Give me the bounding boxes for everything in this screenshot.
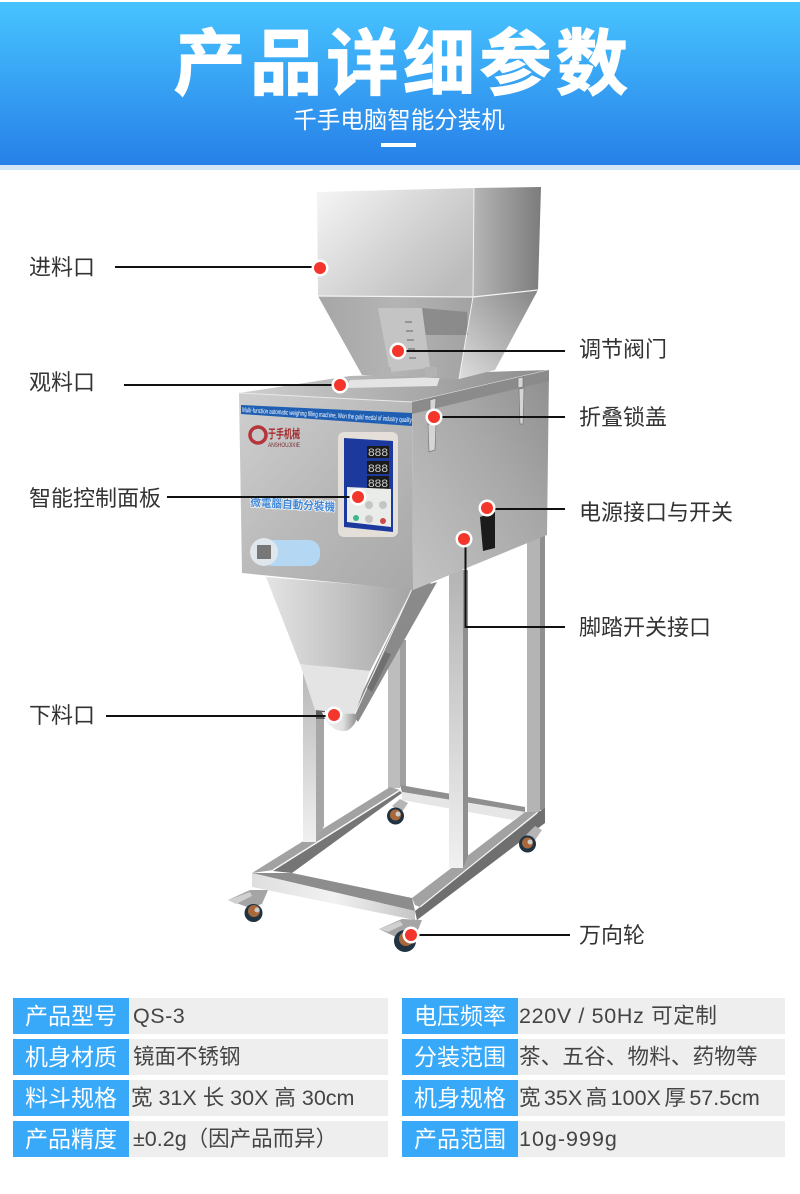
funnel front [266,577,412,671]
spec: 机身规格 [402,1080,785,1116]
hopper [317,187,541,379]
spec: 机身材质 [13,1039,388,1075]
spec: 料斗规格: 料斗规格 [25,1085,117,1111]
funnel lower plate [300,664,370,714]
title: 产品详细参数 [173,25,632,105]
body top [239,370,549,402]
callouts [29,255,733,948]
upper hopper right [473,187,541,297]
digital displays [367,446,389,489]
subtitle: 千手电脑智能分装机 [293,107,505,133]
upper hopper front [317,188,474,297]
front beam [252,873,415,920]
callout: 调节阀门: 调节阀门 [579,337,667,362]
hopper corner edges [459,188,474,379]
specification table [13,998,785,1157]
spec: 产品范围: 产品范围 [414,1126,506,1152]
callout: 万向轮: 万向轮 [579,923,645,948]
inspection window [345,377,440,388]
spec: 分装范围: 分装范围 [414,1044,506,1070]
callout: 折叠锁盖: 折叠锁盖 [579,405,667,430]
panel blue face [344,438,393,532]
sight window [378,308,437,377]
brand logo: ANSHOUJIXIE [268,443,300,449]
spec: 产品范围 [402,1121,785,1157]
display digits: 888 [368,447,388,459]
spec: 料斗规格: 宽 31X 长 30X 高 30cm [131,1086,354,1110]
callout: 智能控制面板 [29,486,366,511]
callout: 脚踏开关接口 [456,530,711,640]
callout: 观料口: 观料口 [29,370,95,395]
spec: 产品精度 [13,1121,388,1157]
callout: 折叠锁盖 [426,405,667,430]
lid band [412,370,549,414]
side clamp lower [367,652,391,692]
spout [322,712,357,731]
left beam [252,787,402,873]
lower hopper right [459,290,538,379]
caster: back left [387,799,408,824]
brand logo: 于手机械 [268,426,300,441]
callout: 电源接口与开关 [478,500,733,525]
spec: 产品型号: 产品型号 [25,1003,117,1029]
spec: 产品型号 [13,998,388,1034]
spec: 产品精度: ±0.2g（因产品而异） [133,1127,337,1151]
right beam [412,808,545,920]
callout: 调节阀门 [390,337,667,362]
caster: front right [379,919,422,952]
spec: 电压频率: 电压频率 [414,1003,506,1029]
stand frame [252,530,545,920]
spec: 产品型号: QS-3 [133,1004,185,1028]
display digits [368,447,388,490]
display digits: 888 [368,478,388,490]
funnel side [352,582,437,722]
brand logo [250,426,300,449]
callout: 进料口: 进料口 [29,255,95,280]
callout: 脚踏开关接口: 脚踏开关接口 [579,615,711,640]
spec: 产品精度: 产品精度 [25,1126,117,1152]
spec: 机身材质: 镜面不锈钢 [133,1045,241,1069]
callout: 下料口 [29,703,342,728]
callout: 下料口: 下料口 [29,703,95,728]
hopper edges [318,290,538,297]
spec: 机身规格: 机身规格 [414,1085,506,1111]
side clamp upper [409,566,431,617]
back right leg [527,530,545,812]
control panel [338,432,398,537]
body right face [412,371,549,590]
discharge funnel [266,566,437,731]
title dash [381,143,416,147]
front right leg [449,570,468,868]
main body [239,370,549,590]
callout: 观料口 [29,370,348,395]
funnel lit edge [355,589,412,714]
top edge highlight [239,370,549,402]
header banner [0,2,800,170]
latch: left [428,398,436,452]
front left leg [303,660,325,842]
display digits: 888 [368,463,388,475]
callout: 进料口 [29,255,328,280]
spec: 机身材质: 机身材质 [25,1044,117,1070]
callout: 电源接口与开关: 电源接口与开关 [579,500,733,525]
power socket [480,512,495,551]
spec: 电压频率 [402,998,785,1034]
spec: 产品范围: 10g-999g [519,1127,618,1151]
latch: right [518,377,524,424]
inner shadow [393,308,468,335]
blue strip [241,405,412,426]
back left leg [388,640,406,788]
caster: front left [228,890,268,922]
casters [228,799,542,952]
callout: 万向轮 [402,923,645,948]
back beam [400,785,525,820]
spec: 电压频率: 220V / 50Hz 可定制 [519,1004,718,1028]
QR sticker [250,538,320,566]
caster: back right [519,826,542,852]
spec: 料斗规格 [13,1080,388,1116]
callout: 智能控制面板: 智能控制面板 [29,486,161,511]
blue strip: Multi-function automatic weighing filling machine, Won the gold medal of industry quality [242,407,412,424]
lower hopper front [318,296,473,379]
spec: 机身规格: 宽 35X 高 100X 厚 57.5cm [519,1086,760,1110]
slogan: 微電腦自動分裝機 [250,495,336,514]
body front face [239,393,413,590]
spec: 分装范围 [402,1039,785,1075]
key pad [347,487,391,527]
spec: 分装范围: 茶、五谷、物料、药物等 [519,1045,758,1069]
